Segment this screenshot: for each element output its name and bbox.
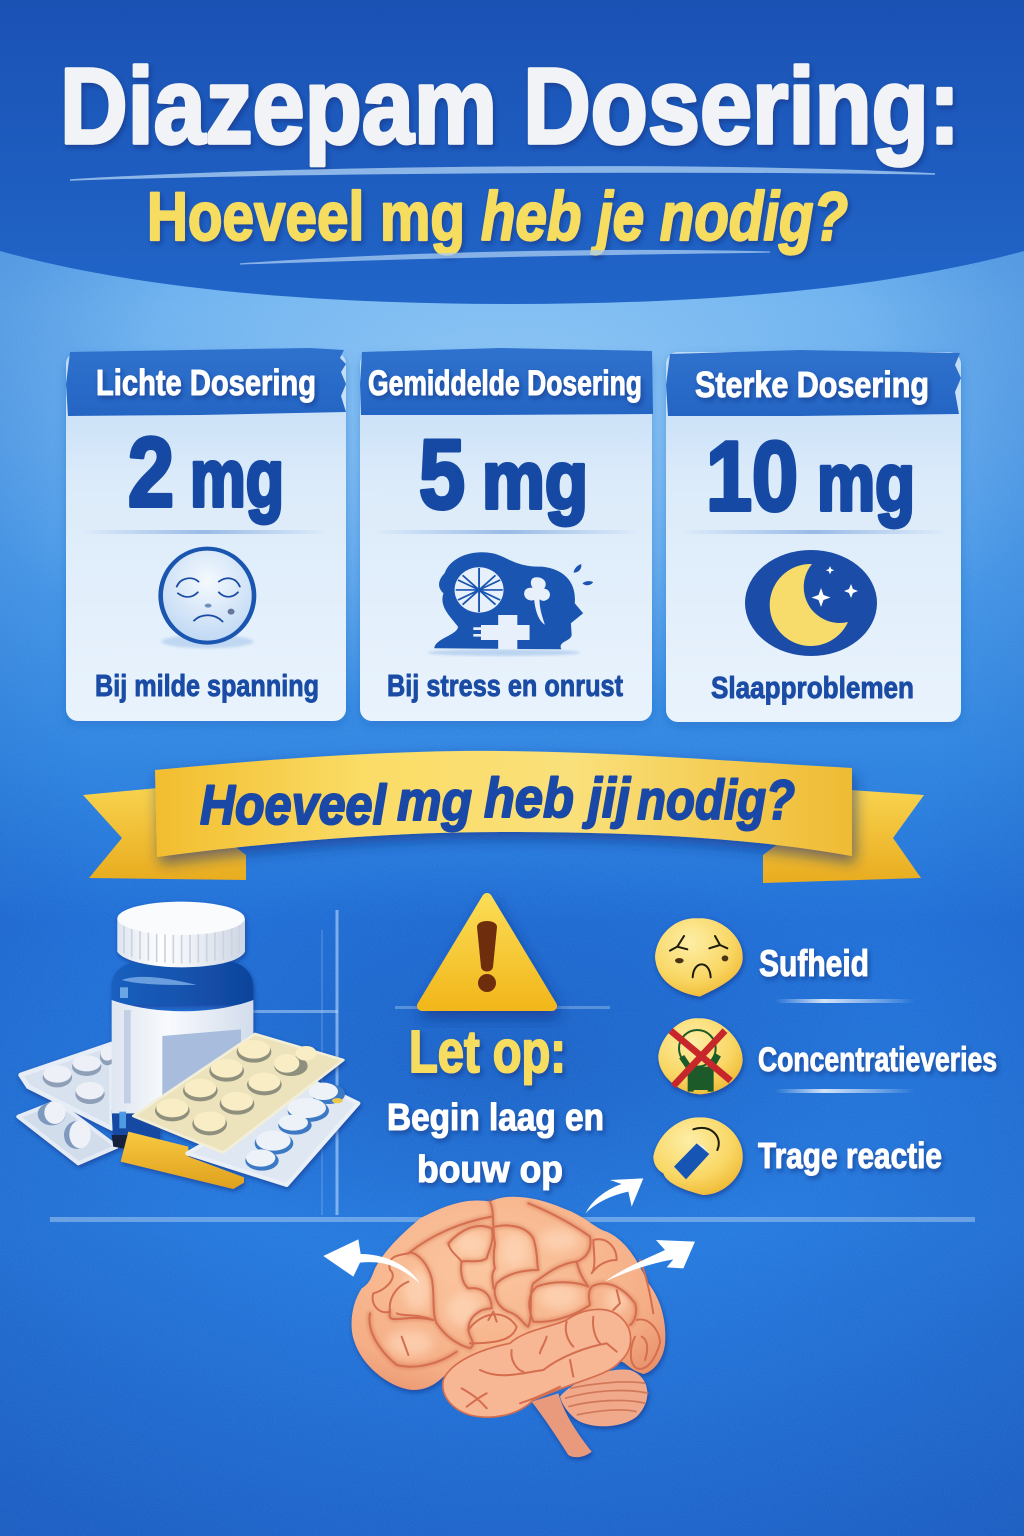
ribbon banner xyxy=(83,751,924,883)
bottle cap xyxy=(117,902,245,967)
subtitle xyxy=(147,178,848,255)
label: bij stress en onrust: Bij stress en onrust xyxy=(387,668,623,703)
panel: lichte dosering xyxy=(66,348,346,721)
side effect: trage reactie xyxy=(653,1117,942,1195)
advice text: Begin laag en xyxy=(387,1097,604,1139)
icon: moon and stars xyxy=(745,550,877,656)
brain folds xyxy=(369,1202,660,1369)
dose: 5 mg: 5 xyxy=(419,419,465,529)
bottle xyxy=(112,962,253,1149)
dose: 2 mg xyxy=(128,417,284,527)
warning: let op xyxy=(387,898,604,1191)
label: sufheid: Sufheid xyxy=(759,943,869,984)
card header: gemiddelde dosering xyxy=(360,348,653,415)
card header: lichte dosering: Lichte Dosering xyxy=(96,362,316,403)
ribbon text: mg xyxy=(397,769,472,832)
temporal lobe xyxy=(443,1309,631,1417)
side effect: sufheid xyxy=(655,918,869,997)
brain highlights xyxy=(387,1228,628,1357)
icon: crossed out concentration xyxy=(658,1018,743,1094)
card header: sterke dosering xyxy=(666,350,961,416)
arrow: brain left xyxy=(323,1239,420,1283)
ribbon text xyxy=(200,766,795,836)
brain stem xyxy=(532,1393,592,1457)
subtitle: heb je nodig? xyxy=(481,178,848,255)
subtitle underline xyxy=(240,250,770,264)
panel: gemiddelde dosering xyxy=(360,348,653,721)
brain folds shadow xyxy=(369,1202,636,1367)
yellow box xyxy=(121,1132,244,1189)
panel: sterke dosering xyxy=(666,350,961,722)
icon: head with stress symbols xyxy=(427,552,593,656)
dose: 5 mg: mg xyxy=(482,435,588,526)
header band xyxy=(0,0,1024,304)
dose: 10 mg xyxy=(706,421,915,531)
card header: sterke dosering: Sterke Dosering xyxy=(695,364,929,405)
ribbon text: heb jij xyxy=(484,766,631,829)
blister pack: back left lower xyxy=(18,1101,117,1163)
dose: 5 mg xyxy=(419,419,588,529)
arrow: brain right xyxy=(605,1240,695,1282)
icon: warning triangle xyxy=(422,898,552,1006)
ribbon body xyxy=(155,751,852,857)
blister pack: front right white xyxy=(187,1082,358,1185)
icon: sleepy face xyxy=(161,549,254,648)
cerebrum xyxy=(352,1197,665,1390)
blister pack: front yellow xyxy=(133,1034,343,1153)
advice text xyxy=(387,1097,604,1191)
label: bij milde spanning: Bij milde spanning xyxy=(95,668,319,703)
dose: 10 mg: mg xyxy=(817,437,915,528)
advice text: bouw op xyxy=(417,1149,563,1191)
arrow: brain to side effects xyxy=(586,1178,643,1213)
heading: let op: Let op: xyxy=(409,1019,566,1085)
dose: 10 mg: 10 xyxy=(706,421,798,531)
title underline xyxy=(70,167,935,180)
label: trage reactie: Trage reactie xyxy=(758,1135,942,1176)
blister pack: back left upper xyxy=(21,1044,115,1128)
cerebellum xyxy=(560,1369,648,1426)
subtitle: Hoeveel mg xyxy=(147,178,465,255)
label: slaapproblemen: Slaapproblemen xyxy=(711,670,914,705)
icon: tired face xyxy=(655,918,743,997)
brain illustration xyxy=(323,1178,695,1457)
card header: lichte dosering xyxy=(66,348,346,416)
side effect: concentratieveries xyxy=(658,1018,997,1094)
dose: 2 mg: 2 xyxy=(128,417,174,527)
ribbon text: Hoeveel xyxy=(200,773,387,836)
card header: gemiddelde dosering: Gemiddelde Dosering xyxy=(368,364,642,403)
ribbon left tail xyxy=(83,788,246,880)
ribbon text: nodig? xyxy=(637,768,795,831)
side effects xyxy=(653,918,997,1195)
grid lines xyxy=(50,910,975,1222)
dose: 2 mg: mg xyxy=(190,433,284,524)
pill bottle and blister packs xyxy=(18,902,358,1189)
ribbon right tail xyxy=(763,790,924,883)
icon: slow reaction xyxy=(653,1117,743,1195)
